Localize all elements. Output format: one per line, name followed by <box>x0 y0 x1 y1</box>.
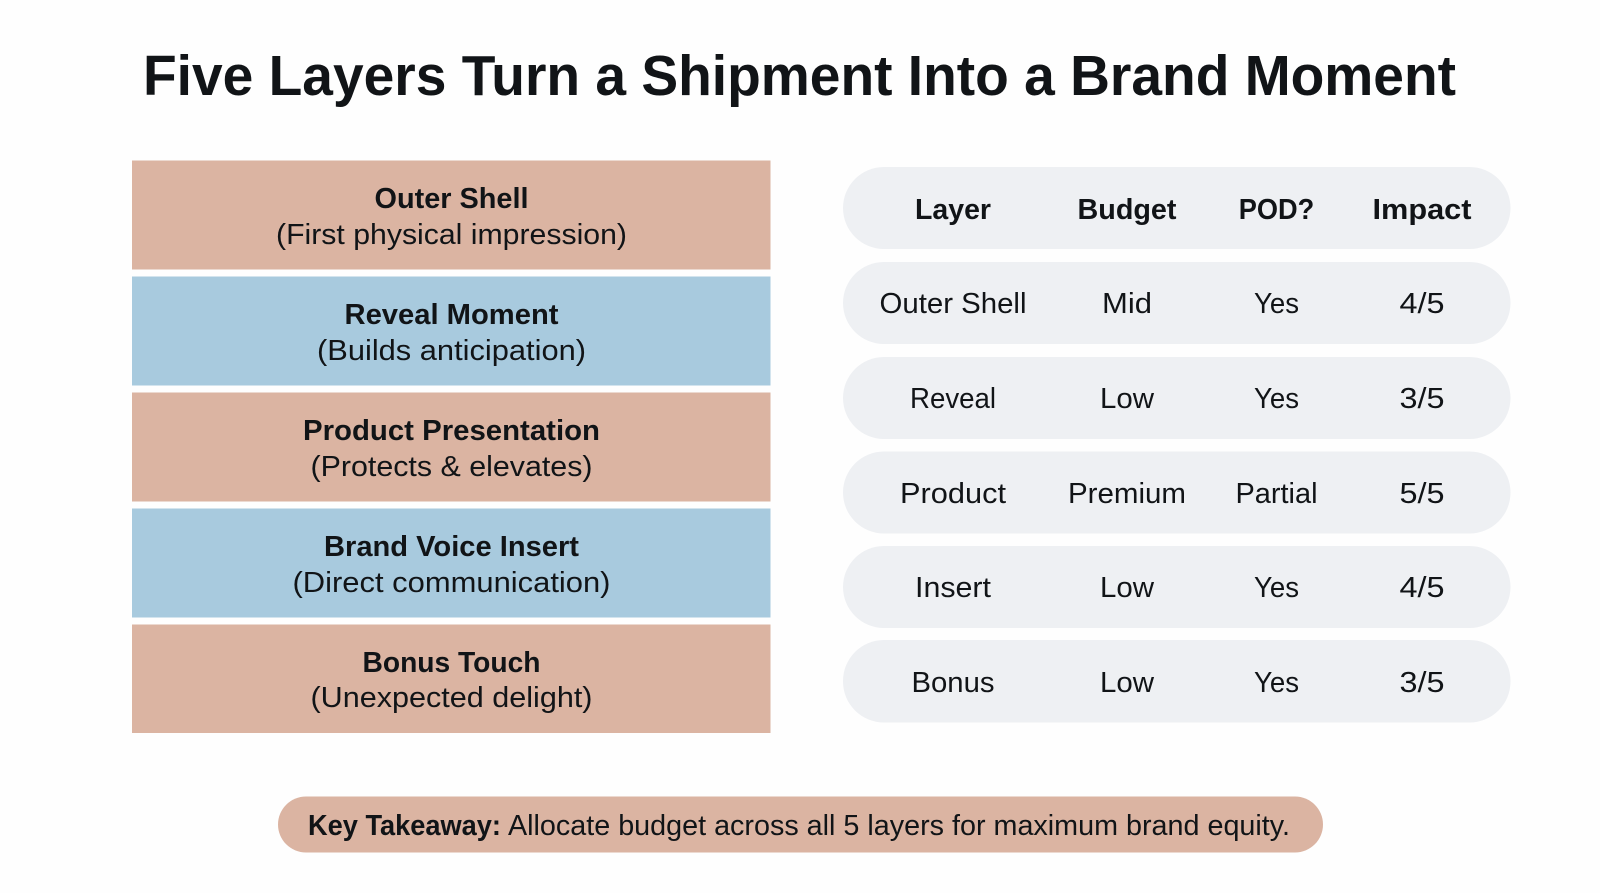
table row: product: 5/5 <box>1400 478 1444 510</box>
layer: outer shell <box>132 160 770 270</box>
table row: bonus: 3/5 <box>1400 667 1444 699</box>
table row: reveal: 3/5 <box>1400 383 1444 415</box>
layer: brand voice insert: (Direct communication) <box>292 567 610 599</box>
layer: product presentation: Product Presentation <box>303 415 600 447</box>
table row: bonus <box>843 640 1510 722</box>
layer: outer shell: (First physical impression) <box>276 219 627 251</box>
table row: insert: Yes <box>1254 572 1299 604</box>
table row: insert: 4/5 <box>1400 572 1444 604</box>
title: Five Layers Turn a Shipment Into a Brand Moment <box>143 44 1456 108</box>
layer: brand voice insert <box>132 508 770 618</box>
table row: insert: Low <box>1100 572 1155 604</box>
panel: five layer stack <box>132 160 770 733</box>
table row: outer shell: Mid <box>1102 288 1152 320</box>
table row: bonus: Bonus <box>912 667 994 699</box>
table row: product <box>843 452 1510 534</box>
layer: bonus touch <box>132 624 770 733</box>
table row: outer shell: Outer Shell <box>880 288 1026 320</box>
table row: outer shell: 4/5 <box>1400 288 1444 320</box>
table row: product: Partial <box>1236 478 1318 510</box>
table row: insert: Insert <box>915 572 991 604</box>
table row: insert <box>843 546 1510 628</box>
layer: product presentation: (Protects & elevates) <box>310 451 592 483</box>
callout: key takeaway <box>278 796 1323 852</box>
table row: bonus: Yes <box>1254 667 1299 699</box>
table row: product: Product <box>900 478 1006 510</box>
table row: outer shell: Yes <box>1254 288 1299 320</box>
layer: outer shell: Outer Shell <box>374 183 528 215</box>
table row: reveal: Yes <box>1254 383 1299 415</box>
layer: reveal moment: (Builds anticipation) <box>317 335 586 367</box>
layer: reveal moment <box>132 276 770 386</box>
panel: comparison table <box>843 167 1510 722</box>
layer: reveal moment: Reveal Moment <box>344 299 559 331</box>
layer: bonus touch: Bonus Touch <box>362 647 540 679</box>
table header row <box>843 167 1510 249</box>
callout: key takeaway: Allocate budget across all 5 layers for maximum brand equity. <box>508 810 1290 842</box>
table row: bonus: Low <box>1100 667 1155 699</box>
layer: bonus touch: (Unexpected delight) <box>310 682 592 714</box>
table row: reveal: Reveal <box>910 383 996 415</box>
layer: product presentation <box>132 392 770 502</box>
table header row: Impact <box>1372 194 1472 226</box>
table row: reveal: Low <box>1100 383 1155 415</box>
table row: outer shell <box>843 262 1510 344</box>
table header row: Layer <box>915 194 991 226</box>
table row: product: Premium <box>1068 478 1186 510</box>
table row: reveal <box>843 357 1510 439</box>
layer: brand voice insert: Brand Voice Insert <box>324 531 579 563</box>
callout: key takeaway: Key Takeaway: <box>308 810 501 842</box>
table header row: POD? <box>1239 194 1314 226</box>
table header row: Budget <box>1078 194 1177 226</box>
